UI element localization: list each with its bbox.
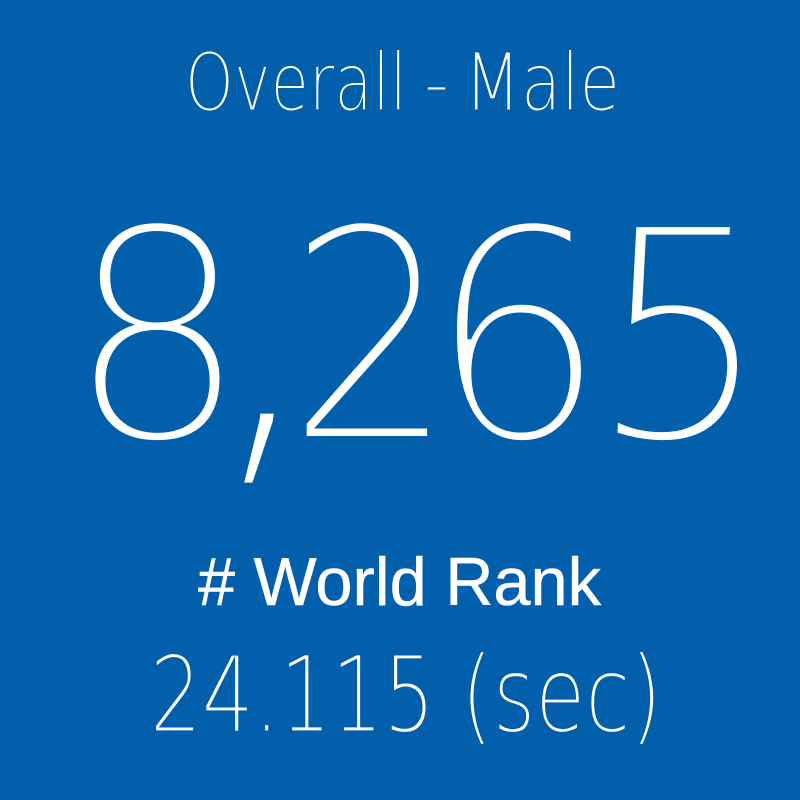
- big number: 6: [428, 167, 607, 507]
- big number: 2: [286, 167, 456, 507]
- time value: 24.115 (sec): [150, 634, 662, 756]
- title: [185, 37, 620, 129]
- big number: [66, 77, 781, 529]
- big number: 8: [66, 168, 249, 508]
- big number: 5: [584, 167, 781, 507]
- title: Male: [464, 37, 620, 129]
- title: -: [424, 37, 449, 129]
- big number: ,: [206, 77, 364, 529]
- title: Overall: [185, 37, 407, 129]
- metric label: # World Rank: [198, 544, 602, 620]
